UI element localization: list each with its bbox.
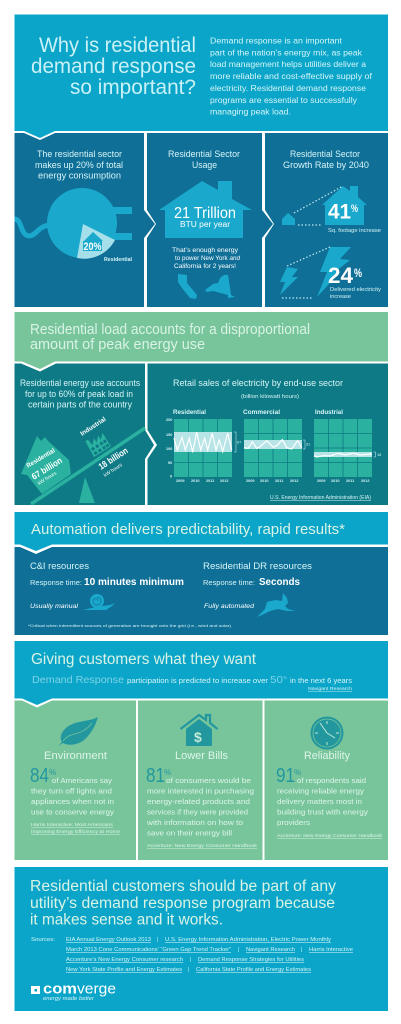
text: energy comparison [172,247,240,270]
column: Residential DR resources: Fully automated [204,604,255,610]
stat: 84%: Harris Interactive: Most Americans [31,822,114,827]
sources list: March 2013 Cone Communications’ “Green Gap Trend Tracker” [66,947,231,953]
heading: residential share: The residential sector [37,149,122,159]
column: C&I resources: C&I resources [30,561,90,571]
title [31,34,196,99]
heading: usage: Residential Sector [168,149,240,159]
title: so important? [70,76,196,99]
text: energy comparison: to power New York and [175,255,240,262]
intro text block: load management helps utilities deliver a [210,60,367,69]
panel: customers header [14,641,388,705]
heading: usage: Usage [192,160,217,170]
heading: conclusion: it makes sense and it works. [30,912,223,928]
icon: electricity growth [280,247,381,300]
text: energy comparison: California for 2 years! [174,263,236,270]
icon: snail [83,594,115,610]
intro text block [210,36,373,116]
heading: retail sales: (billion kilowatt hours) [241,394,299,400]
text: participation forecast: 50 [270,675,284,686]
icon: plug pie chart [14,188,133,263]
text: peak share: certain parts of the country [28,400,133,410]
chart: residential: 2011 [206,479,214,483]
panel: lower bills [138,700,262,860]
chart: residential [166,410,241,483]
column: C&I resources: Response time: [30,580,82,587]
icon: electricity growth: % [354,266,362,280]
text: participation forecast: Navigant Research [308,686,353,691]
chart: industrial: 2009 [317,479,325,483]
stat: 81%: services if they were provided [147,808,248,816]
chart: commercial: 2011 [275,479,283,483]
stat: 81%: of consumers would be [166,776,251,785]
icon: house with dollar [180,715,218,746]
icon: electricity growth: 24 [328,263,354,288]
stat: 91% [276,765,383,838]
icon: house with usage figure: BTU per year [180,220,230,229]
stat: 91%: providers [277,818,310,827]
chart: residential: 200 [166,418,172,422]
logo: comverge: com [43,980,77,998]
sources list: California State Profile and Energy Estimates [196,967,311,973]
footnote: *Critical when intermittent sources of generation are brought onto the grid (i.e., wind and solar) [28,624,232,628]
icon: California map [178,274,197,299]
panel: environment [14,700,136,860]
heading: residential share [35,149,123,180]
text: participation forecast: % [283,675,287,680]
panel: growth rate [265,133,388,307]
icon: plug pie chart: 20% [84,241,102,253]
text: participation forecast: participation is predicted to increase over [127,678,269,685]
intro text block: part of the nation’s energy mix, as peak [210,48,363,58]
heading: usage [168,149,240,170]
column: C&I resources: Usually manual [30,604,79,610]
chart: industrial: Industrial [315,410,343,416]
chart: commercial: 2010 [260,479,268,483]
heading: growth rate: Residential Sector [290,149,360,159]
chart: industrial: 2010 [331,479,339,483]
sources list: Navigant Research [246,947,295,953]
chart: residential: 150 [166,433,172,437]
logo: comverge: verge [77,980,116,998]
stat: 81%: % [164,768,171,777]
heading: conclusion: utility’s demand response program because [30,895,335,912]
logo: comverge: energy made better [43,996,94,1002]
heading: lower bills: Lower Bills [175,750,228,762]
chart: industrial: 2012 [361,479,369,483]
chart: industrial: 18 [377,453,381,457]
text: participation forecast [32,674,353,691]
intro text block: programs are essential to successfully [210,96,357,105]
chart: residential: Residential [173,410,206,416]
logo: comverge [31,980,116,1002]
heading: peak load [30,321,310,353]
column: Residential DR resources: Response time: [203,580,255,587]
heading: environment: Environment [44,750,107,762]
icon: electricity growth: Delivered electricity [330,287,381,293]
heading: peak load: Residential load accounts for a disproportional [30,321,310,338]
source: EIA: U.S. Energy Information Administration (EIA) [270,495,371,501]
heading: reliability: Reliability [304,750,350,762]
chart: residential: 50 [168,461,172,465]
chart: commercial: 2009 [246,479,254,483]
sources list: | [190,957,191,963]
stat: 84% [30,765,121,834]
chart: commercial [243,410,310,483]
sources list: Accenture’s New Energy Consumer research [66,957,183,963]
stat: 81%: Accenture: New Energy Consumer Handbook [147,843,258,848]
icon: plug pie chart: Residential [104,257,133,263]
stat: 91%: Accenture: New Energy Consumer Handbook [277,833,383,838]
chart: residential: 2009 [176,479,184,483]
stat: 84%: use to conserve energy [31,808,114,816]
chart: residential: 0 [170,474,172,478]
stat: 81%: energy-related products and [147,797,250,806]
intro text block: electricity. Residential demand response [210,84,367,93]
panel: conclusion and sources [14,867,388,1011]
stat: 91%: 91 [276,765,295,787]
heading: growth rate: Growth Rate by 2040 [283,160,369,170]
panel: residential usage [147,133,273,307]
intro text block: more reliable and cost-effective supply of [210,72,373,81]
text: peak share [20,378,141,410]
text: peak share: Residential energy use accounts [20,378,141,388]
sources list: Demand Response Strategies for Utilities [198,957,304,963]
icon: house growth: % [351,203,358,215]
text: energy comparison: That’s enough energy [172,247,239,254]
chart: commercial: Commercial [243,410,280,416]
intro text block: managing peak load. [210,108,291,116]
chart: residential: 2012 [220,479,228,483]
heading: growth rate [283,149,369,170]
chart: industrial [314,410,381,483]
chart: seesaw comparison: kW hours [103,462,124,479]
panel: residential share [14,133,155,307]
stat: 81%: save on their energy bill [147,828,232,838]
title: demand response [31,55,196,78]
column: C&I resources: 10 minutes minimum [84,577,184,588]
panel: automation header [14,512,388,551]
chart: residential: 2010 [191,479,199,483]
panel: reliability [264,700,388,860]
heading: residential share: makes up 20% of total [35,160,123,170]
heading: automation: Automation delivers predictability, rapid results* [31,521,345,538]
chart: industrial: 2011 [346,479,354,483]
stat: 91%: delivery matters most in [277,797,362,806]
stat: 81%: more interested in purchasing [147,786,254,796]
stat: 91%: of respondents said [297,776,366,785]
sources list: EIA Annual Energy Outlook 2013 [66,937,151,943]
icon: house growth [282,186,381,234]
stat: 81% [146,765,258,848]
sources list: Sources: [31,937,56,943]
heading: retail sales [173,378,343,400]
chart: seesaw comparison: 67 billion [30,455,64,482]
stat: 91%: receiving reliable energy [277,786,364,796]
heading: conclusion [30,878,336,928]
panel: peak load header [14,312,388,369]
sources list: New York State Profile and Energy Estimates [66,967,182,973]
chart: commercial: 31 [306,442,310,446]
icon: rabbit [257,593,295,617]
stat: 84%: they turn off lights and [31,786,112,796]
chart: seesaw comparison: Residential [25,447,57,470]
column: Residential DR resources [203,561,313,617]
heading: residential share: energy consumption [38,170,121,180]
icon: house with usage figure [159,181,252,238]
sources list: Harris Interactive [309,947,353,953]
sources list [31,937,353,973]
stat: 84%: Improving Energy Efficiency at Home [31,829,121,834]
icon: leaf [58,717,98,746]
icon: clock [310,716,344,750]
panel: automation details [14,547,388,635]
panel: residential peak share [14,364,154,505]
text: participation forecast: in the next 6 years [290,678,353,685]
chart: seesaw comparison: 18 billion [97,445,130,472]
text: peak share: for up to 60% of peak load in [25,389,133,399]
stat: 84%: 84 [30,765,49,787]
heading: retail sales: Retail sales of electricity by end-use sector [173,378,343,388]
heading: peak load: amount of peak energy use [30,336,205,353]
intro text block: Demand response is an important [210,36,343,46]
heading: conclusion: Residential customers should be part of any [30,878,336,895]
stat: 84%: of Americans say [52,776,112,785]
panel: retail sales [148,364,388,505]
sources list: | [188,967,189,973]
title: Why is residential [39,34,196,57]
heading: customers: Giving customers what they want [31,651,257,668]
icon: house growth: Sq. footage increase [328,228,381,234]
column: Residential DR resources: Residential DR resources [203,561,313,571]
chart: seesaw comparison: Industrial [79,416,108,438]
icon: New York map [205,275,235,298]
stat: 91%: building trust with energy [277,808,368,816]
chart: seesaw comparison: kW hours [37,470,58,487]
stat: 84%: appliances when not in [31,797,114,806]
sources list: U.S. Energy Information Administration, Electric Power Monthly [165,937,331,943]
icon: house with dollar: $ [194,729,202,745]
chart: seesaw comparison [21,416,145,504]
stat: 81%: with information on how to [146,818,243,827]
column: C&I resources [30,561,184,610]
stat: 91%: % [294,768,301,777]
sources list: | [157,937,158,943]
sources list: | [301,947,302,953]
icon: electricity growth: increase [330,294,351,300]
icon: house growth: 41 [328,200,351,224]
chart: residential: 100 [166,447,172,451]
panel: intro header [14,14,388,138]
icon: house with usage figure: 21 Trillion [174,205,236,222]
chart: residential: 67 [237,440,241,444]
sources list: | [238,947,239,953]
stat: 84%: % [49,768,56,777]
column: Residential DR resources: Seconds [259,577,300,588]
text: participation forecast: Demand Response [32,674,124,686]
chart: commercial: 2012 [290,479,298,483]
stat: 81%: 81 [146,765,165,787]
